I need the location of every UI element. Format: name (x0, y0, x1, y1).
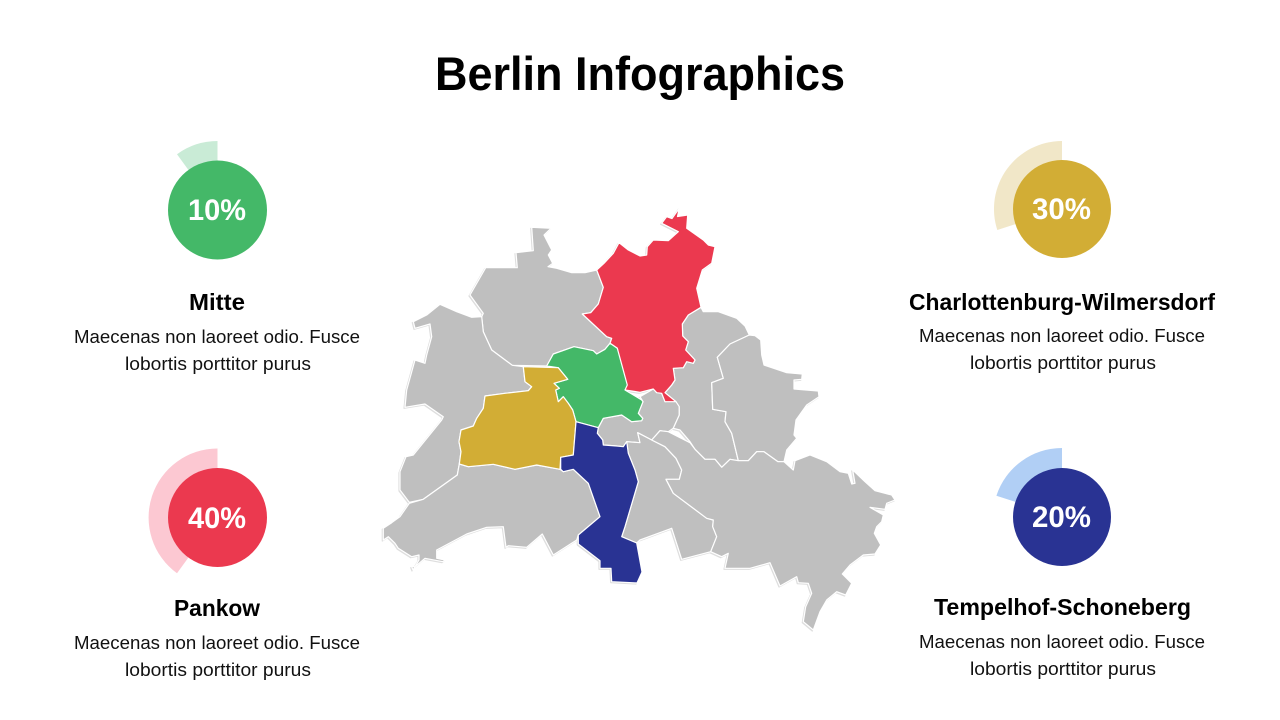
wedge: Mitte 10% (177, 141, 218, 210)
district: Treptow-Kopenick (652, 431, 895, 630)
district: Tempelhof-Schoneberg (blue) (561, 422, 642, 583)
panel: Mitte (74, 141, 360, 374)
value: 20%: 20% (1032, 501, 1091, 534)
value: 40%: 40% (188, 502, 246, 535)
circle: Mitte (168, 160, 267, 260)
text: Mitte description: Maecenas non laoreet odio. Fusce (74, 327, 360, 347)
text: Tempelhof-Schoneberg description: Maecenas non laoreet odio. Fusce (919, 632, 1205, 652)
heading: Tempelhof-Schoneberg: Tempelhof-Schoneberg (934, 594, 1191, 620)
district: Neukolln (622, 433, 717, 559)
heading: Mitte: Mitte (189, 289, 245, 315)
text: Charlottenburg-Wilmersdorf description: lobortis porttitor purus (970, 353, 1156, 373)
value: 10%: 10% (188, 194, 246, 227)
text: Mitte description: lobortis porttitor purus (125, 354, 311, 374)
text: Tempelhof-Schoneberg description (919, 632, 1205, 679)
panel: Charlottenburg-Wilmersdorf (909, 141, 1215, 373)
text: Pankow description (74, 633, 360, 680)
district: Marzahn-Hellersdorf (712, 335, 819, 462)
district: Reinickendorf (470, 227, 612, 366)
text: Mitte description (74, 327, 360, 374)
text: Tempelhof-Schoneberg description: lobortis porttitor purus (970, 659, 1156, 679)
circle: Pankow (168, 468, 267, 567)
wedge: Tempelhof-Schoneberg 20% (996, 448, 1062, 517)
district: Spandau (400, 304, 532, 502)
text: Pankow description: lobortis porttitor purus (125, 660, 311, 680)
district: Mitte (green) (547, 343, 643, 428)
district: Charlottenburg-Wilmersdorf (gold) (459, 367, 576, 469)
text: Pankow description: Maecenas non laoreet odio. Fusce (74, 633, 360, 653)
panel: Tempelhof-Schoneberg (919, 448, 1205, 679)
circle: Tempelhof-Schoneberg (1013, 468, 1111, 566)
map: Berlin districts (383, 208, 895, 630)
wedge: Pankow 40% (149, 448, 218, 573)
wedge: Charlottenburg-Wilmersdorf 30% (994, 141, 1062, 230)
panel: Pankow (74, 448, 360, 680)
district: Pankow (red) (582, 208, 715, 402)
heading: Pankow: Pankow (174, 595, 260, 621)
value: 30%: 30% (1032, 193, 1091, 226)
district: Lichtenberg (665, 307, 749, 467)
heading: Charlottenburg-Wilmersdorf: Charlottenburg-Wilmersdorf (909, 289, 1215, 315)
title: Berlin Infographics (435, 47, 845, 100)
district: Steglitz-Zehlendorf (383, 464, 600, 570)
text: Charlottenburg-Wilmersdorf description (919, 326, 1205, 373)
district: Friedrichshain-Kreuzberg (597, 389, 679, 447)
text: Charlottenburg-Wilmersdorf description: Maecenas non laoreet odio. Fusce (919, 326, 1205, 346)
circle: Charlottenburg-Wilmersdorf (1013, 160, 1111, 258)
